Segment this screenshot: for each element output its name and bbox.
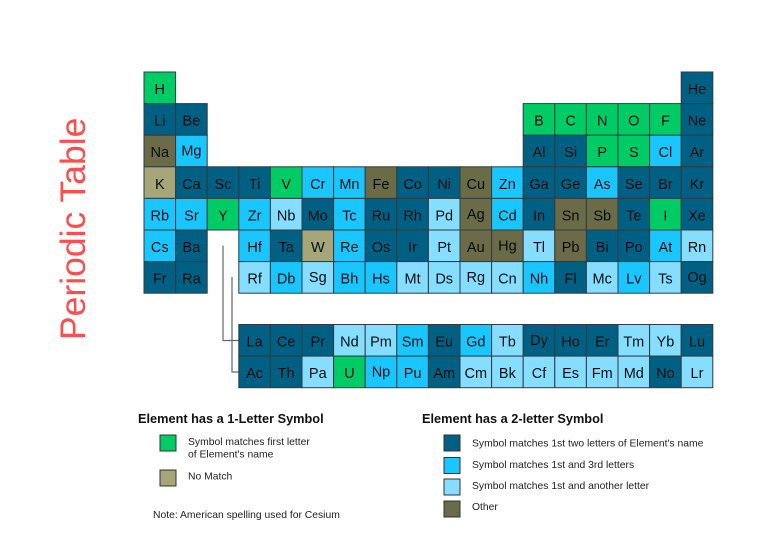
row 5: Nb [277,208,295,224]
actinide row: Np [372,365,390,381]
row 5: Xe [688,208,706,224]
actinide row: U [344,366,355,382]
legend item: first letter match: Symbol matches first letter [188,437,310,448]
row 4: Br [658,177,673,193]
row 7: Sg [309,270,327,286]
row 4: Zn [499,177,516,193]
row 5: Rb [151,208,169,224]
legend item: no match [160,470,233,486]
row 1: H [155,82,165,98]
legend item: first two letters [444,435,704,451]
row 6 [144,230,713,262]
row 6: Pt [437,240,451,256]
row 4: Co [403,177,422,193]
row 5 [144,198,713,230]
row 4: Ti [249,177,260,193]
row 2: N [597,114,607,130]
row 6: Re [340,240,359,256]
row 5: Te [626,208,641,224]
actinide row: Pu [404,366,421,382]
lanthanide row: Yb [657,334,674,350]
row 7: Hs [372,272,390,288]
row 7: Ds [435,272,453,288]
row 6: W [311,240,325,256]
row 4: K [155,177,165,193]
row 2: Li [154,114,165,130]
legend item: first and another letter: Symbol matches 1st and another letter [472,481,650,492]
row 5: In [533,208,545,224]
row 7: Fr [153,272,167,288]
lanthanide row: Gd [466,334,485,350]
legend item: first letter match: of Element's name [188,450,274,460]
actinide row: Bk [499,366,517,382]
actinide row: Th [278,366,295,382]
row 3: Si [564,145,577,161]
row 2: Ne [688,114,706,130]
row 4: Kr [690,177,704,193]
legend: 1-letter symbols [138,411,324,486]
row 4: Ni [437,177,451,193]
row 5: Rh [403,208,422,224]
row 5: Sn [562,208,579,224]
row 4: As [594,177,611,193]
row 6: Bi [596,240,609,256]
legend item: first letter match [160,435,310,460]
row 6: Ba [183,240,201,256]
row 3: Cl [659,145,672,161]
row 7: Mc [593,272,612,288]
lanthanide row: Eu [435,334,453,350]
row 7: Ra [182,272,202,288]
row 7 [144,262,713,293]
actinide row: Md [624,366,644,382]
row 4: Cr [310,177,326,193]
row 2: F [661,114,670,130]
connector lines [223,246,239,372]
row 5: Sb [593,208,611,224]
actinide row: Lr [691,366,704,382]
actinide row: Cm [465,366,487,382]
row 5: I [663,208,667,224]
row 4: Mn [339,177,359,193]
row 7: Mt [405,272,421,288]
row 5: Pd [435,208,453,224]
lanthanide row: Er [595,334,610,350]
row 6: At [659,240,672,256]
lanthanide row: Nd [340,334,359,350]
row 1: He [688,82,706,98]
row 6: Hg [498,238,517,254]
note: Note: American spelling used for Cesium [153,510,340,521]
actinide row: Pa [309,366,328,382]
row 4: Se [625,177,643,193]
legend: 2-letter symbols [422,411,704,517]
lanthanide row: Tb [499,334,516,350]
row 5: Tc [342,208,357,224]
row 7: Rf [247,272,263,288]
row 2 [144,104,713,135]
actinide row: No [656,366,675,382]
row 3: S [629,145,639,161]
row 7: Db [277,272,295,288]
row 3: P [597,145,607,161]
row 6: Os [372,240,390,256]
row 4: Sc [215,177,231,193]
row 3: Na [151,145,170,161]
lanthanide row: Ho [561,334,580,350]
row 5: Ru [372,208,390,224]
legend item: other [444,501,498,517]
row 3: Al [533,145,545,161]
actinide row: Es [562,366,579,382]
row 6: Cs [151,240,169,256]
row 3 [144,135,713,167]
row 6: Hf [247,240,263,256]
legend item: first and third letters: Symbol matches 1st and 3rd letters [472,460,634,471]
title: Periodic Table [53,118,93,340]
row 1 [144,72,713,104]
legend heading: 1-letter: Element has a 1-Letter Symbol [138,411,324,426]
row 5: Mo [308,208,328,224]
row 6: Tl [533,240,545,256]
row 5: Sr [184,208,199,224]
row 7: Bh [341,272,358,288]
row 6: Ir [408,240,417,256]
periodic table main grid [144,72,713,293]
row 4: Ca [182,177,202,193]
legend item: first and third letters [444,458,634,474]
actinide row: Ac [246,366,263,382]
legend item: no match: No Match [188,472,233,482]
lanthanide row: Ce [277,334,295,350]
legend heading: 2-letter: Element has a 2-letter Symbol [422,411,603,426]
row 6: Au [467,240,485,256]
row 4: Cu [467,177,485,193]
row 6: Po [625,240,643,256]
row 2: B [534,114,544,130]
row 2: O [628,114,639,130]
row 7: Ts [658,272,673,288]
row 7: Og [687,270,707,286]
lanthanide row: La [247,334,264,350]
lanthanide row: Pr [311,334,325,350]
row 6: Rn [688,240,706,256]
legend item: other: Other [472,502,498,513]
row 7: Fl [565,272,577,288]
row 4: Fe [373,177,389,193]
actinide row: Am [433,366,455,382]
row 7: Nh [530,272,548,288]
row 3: Mg [181,144,201,160]
row 5: Cd [498,208,517,224]
actinide row: Cf [532,366,547,382]
row 7: Cn [498,272,517,288]
lanthanide row: Lu [689,334,705,350]
lanthanide row: Dy [530,333,549,349]
row 5: Zr [248,208,262,224]
lanthanide row: Tm [623,334,644,350]
actinide row [239,356,713,388]
legend item: first and another letter [444,479,650,495]
row 3: Ar [690,145,704,161]
row 5: Y [218,208,228,224]
row 4: V [281,177,291,193]
row 4: Ge [561,177,580,193]
legend item: first two letters: Symbol matches 1st two letters of Element's name [472,438,704,450]
row 4 [144,167,713,198]
lanthanide row: Pm [370,334,392,350]
row 2: Be [183,114,200,130]
lanthanide and actinide block [239,324,713,388]
lanthanide row [239,324,713,356]
row 2: C [565,114,576,130]
actinide row: Fm [592,366,613,382]
lanthanide row: Sm [402,334,423,350]
row 5: Ag [467,207,485,223]
row 7: Rg [467,270,485,286]
row 7: Lv [626,272,642,288]
row 4: Ga [529,177,550,193]
row 6: Ta [279,240,295,256]
row 6: Pb [562,240,579,256]
